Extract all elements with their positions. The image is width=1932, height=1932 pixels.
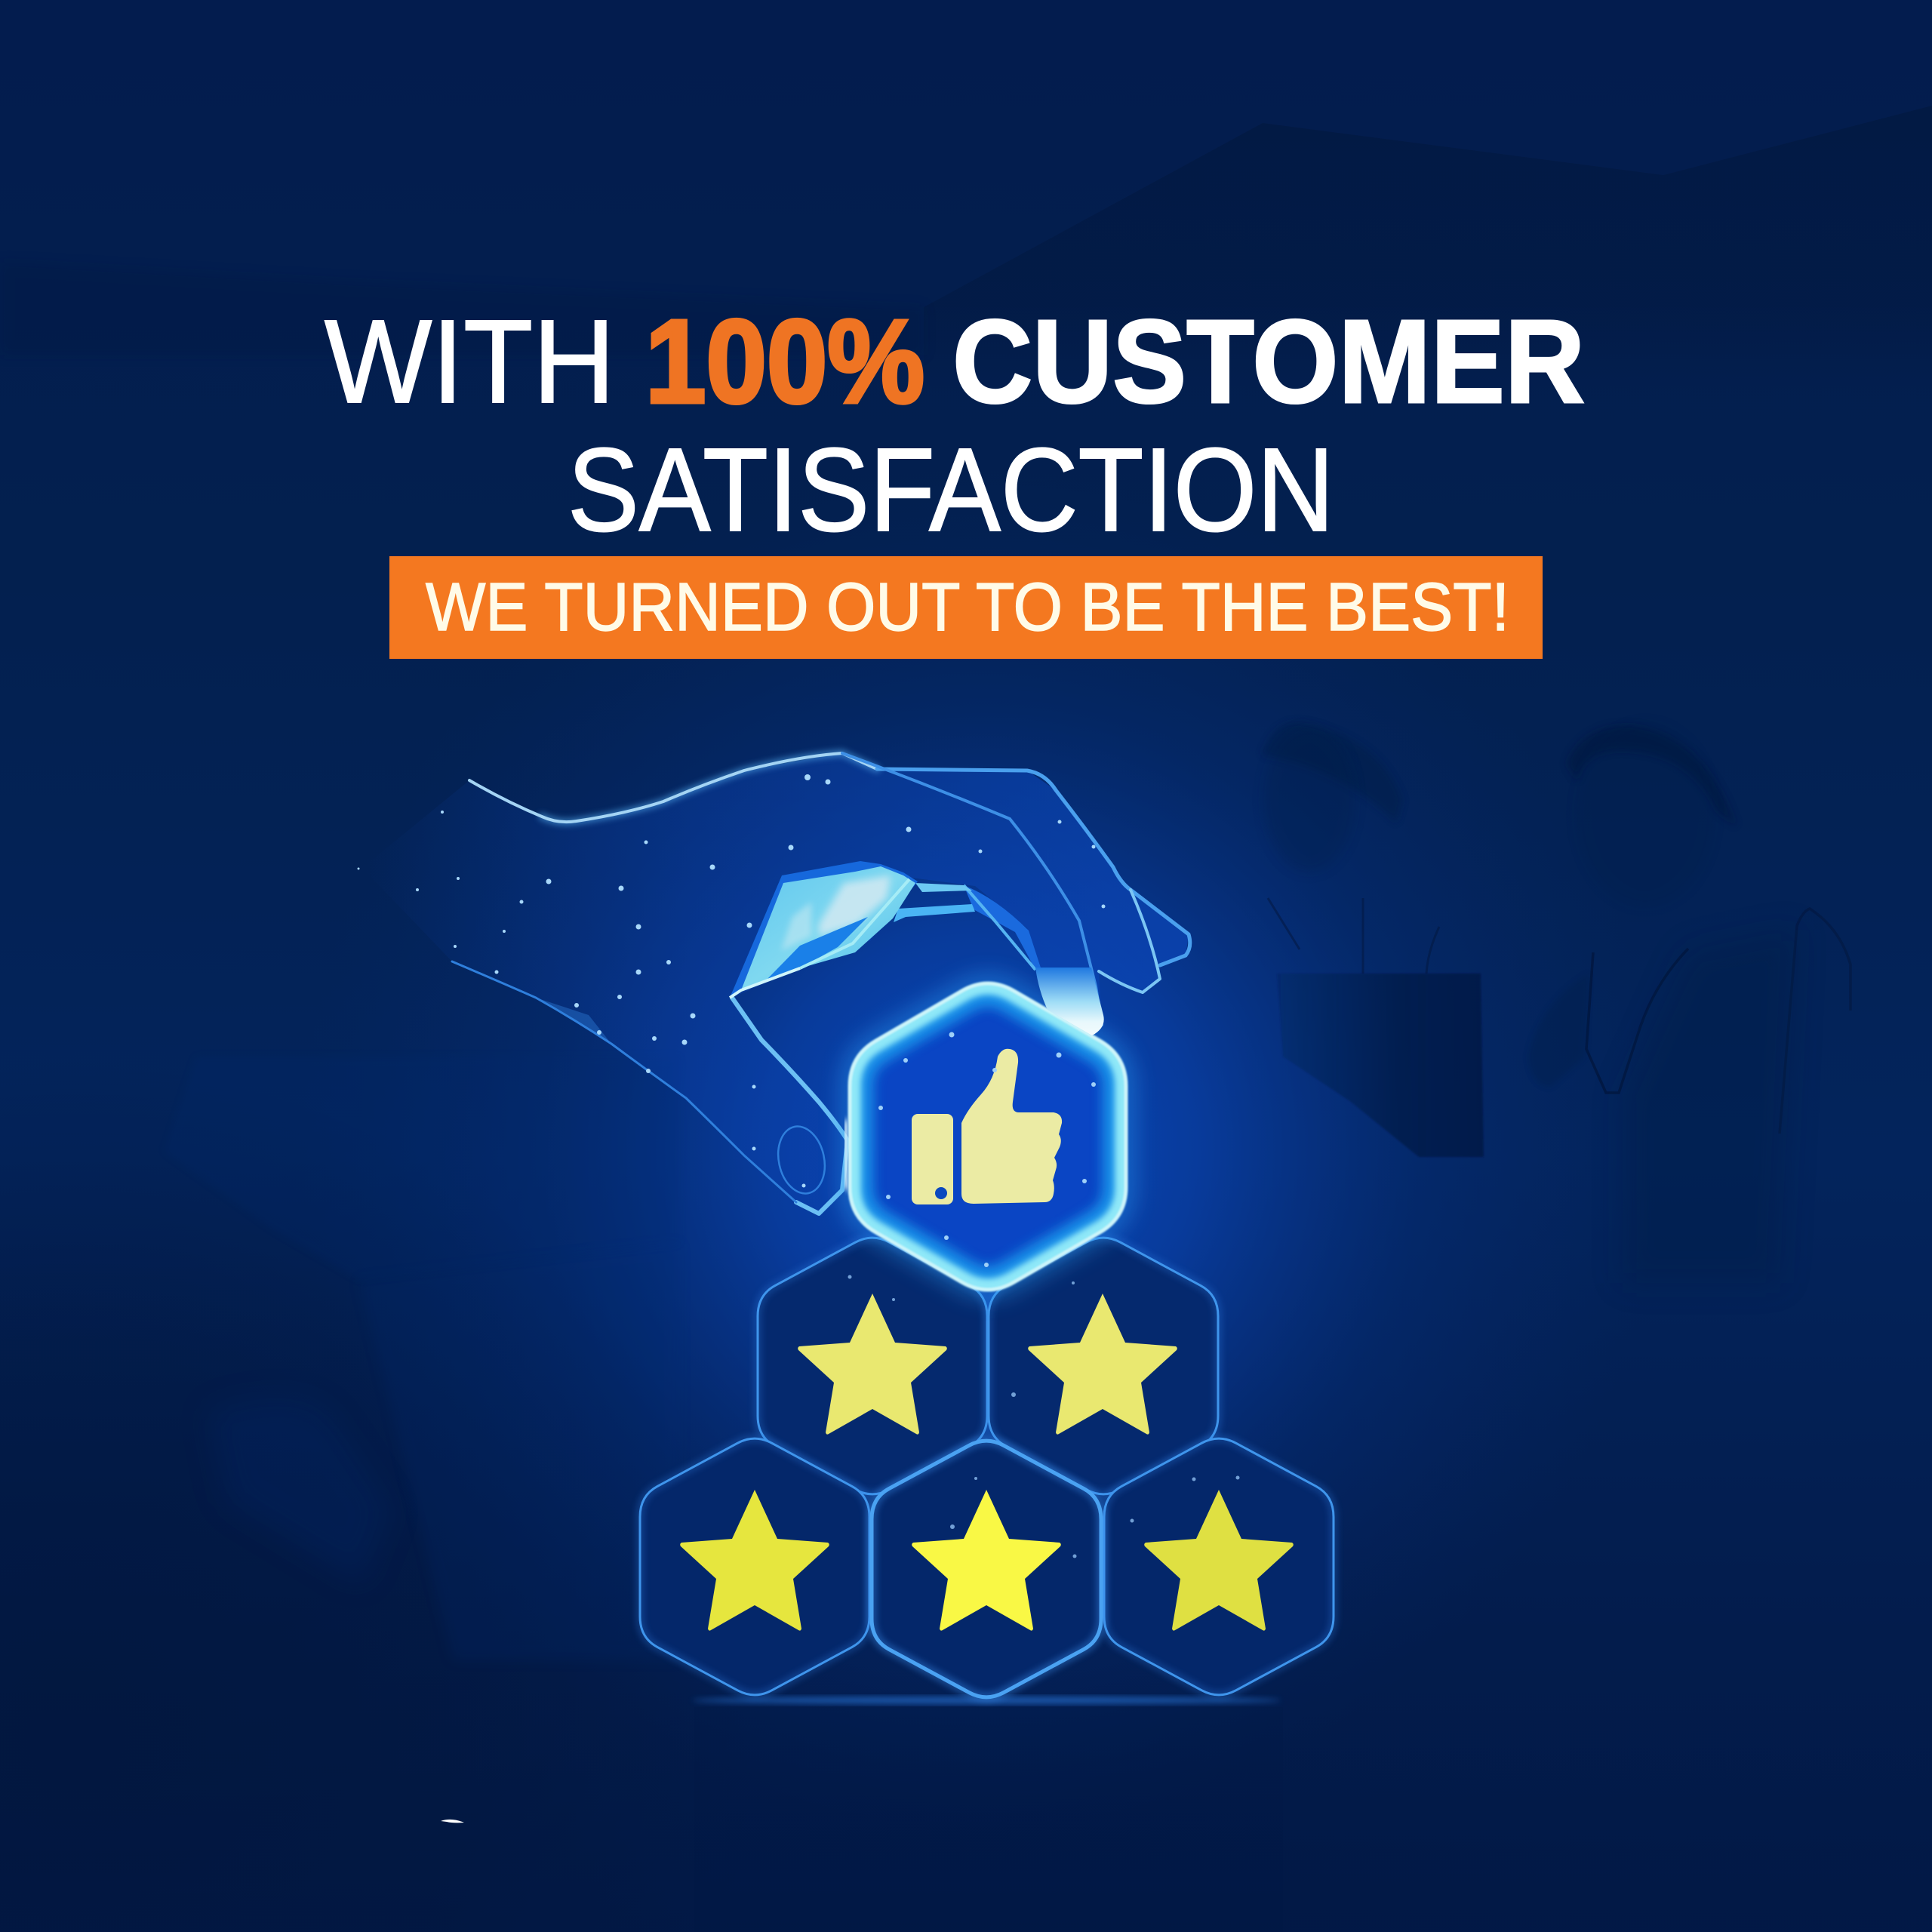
icon: thumbs up xyxy=(912,1049,1062,1204)
hand outline glow xyxy=(452,753,1190,1214)
small white mark xyxy=(441,1820,464,1823)
hand xyxy=(358,753,1190,1214)
floor light line xyxy=(692,1697,1281,1704)
title figure: 100%: 100% xyxy=(645,296,924,428)
title: line two: SATISFACTION xyxy=(568,424,1334,556)
hand particles xyxy=(358,774,1105,1188)
fingertip highlights on hexagon xyxy=(845,968,1104,1185)
hexagons with stars xyxy=(640,1238,1334,1697)
hexagon star: bottom left xyxy=(640,1438,869,1695)
silhouette: worker right xyxy=(1528,724,1850,1283)
background silhouette: workers xyxy=(1262,722,1850,1283)
banner text: WE TURNED OUT TO BE THE BEST! xyxy=(426,570,1509,645)
title word: CUSTOMER: CUSTOMER xyxy=(952,296,1585,428)
thumbs-up hexagon particles xyxy=(878,1032,1096,1267)
title: line one xyxy=(325,296,1585,428)
hexagon star: top right xyxy=(989,1238,1218,1494)
hand crystal web xyxy=(730,861,1047,998)
title word: WITH: WITH xyxy=(325,296,615,428)
thumb tip highlight xyxy=(845,1124,847,1185)
illustration: hand holding thumbs-up hexagon above stars xyxy=(358,753,1334,1704)
orange banner xyxy=(389,556,1543,659)
hexagon star: bottom right xyxy=(1104,1438,1334,1695)
index fingertip pad xyxy=(1035,968,1104,1035)
silhouette: worker left xyxy=(1262,722,1484,1157)
hexagon star: bottom middle xyxy=(872,1441,1101,1697)
hexagon star: top left xyxy=(758,1238,987,1494)
thumbs-up hexagon xyxy=(850,983,1126,1290)
hexagon particles xyxy=(848,1275,1239,1558)
